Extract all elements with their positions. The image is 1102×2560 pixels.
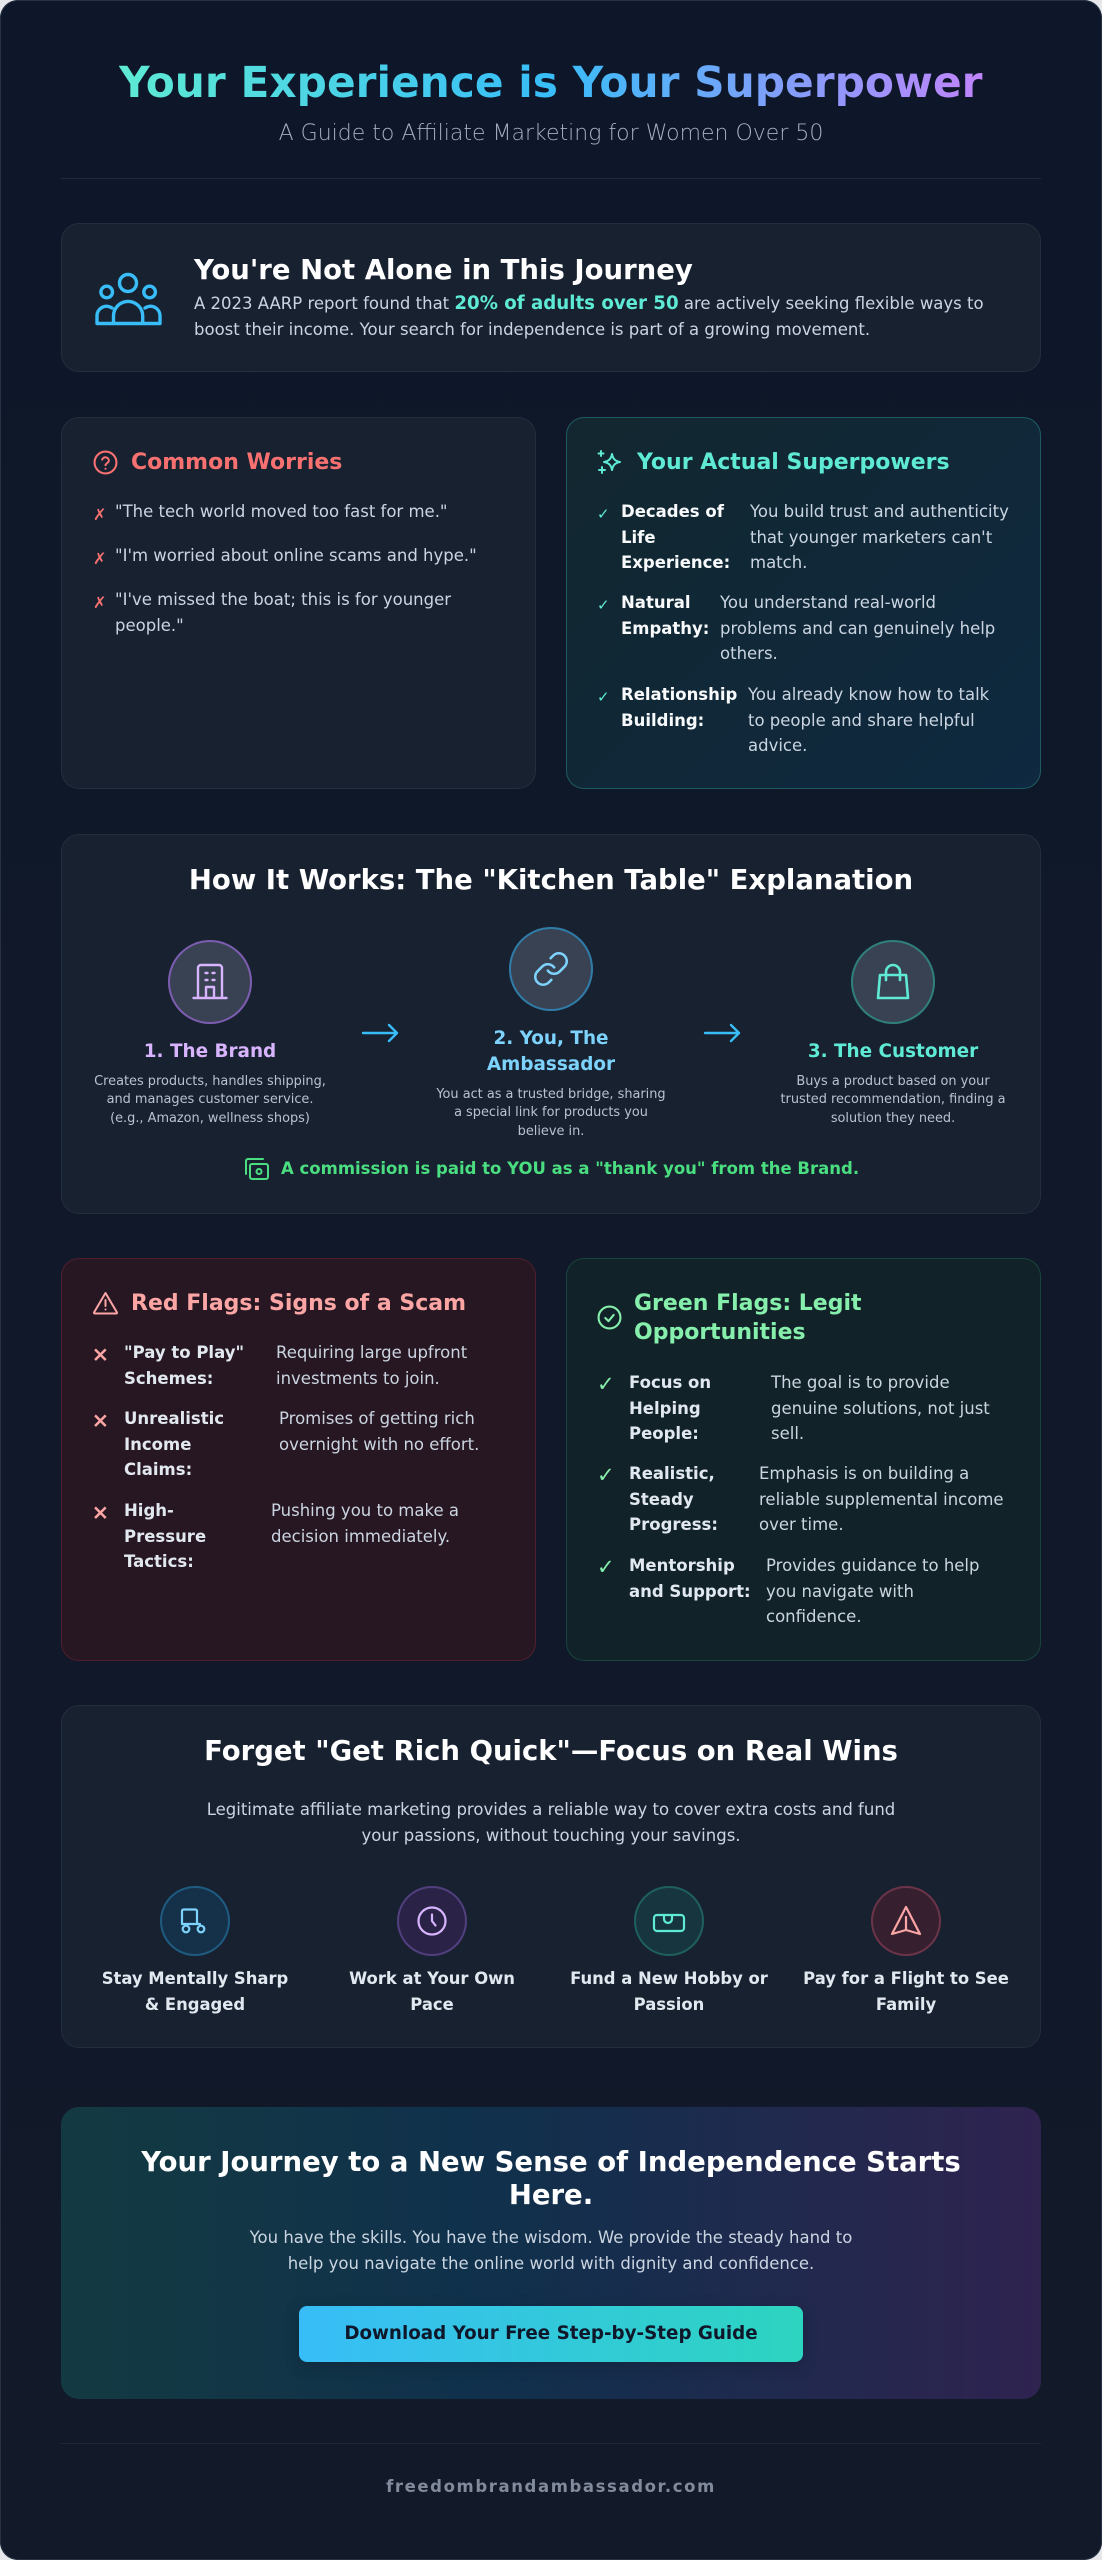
green flag item 3: Provides guidance to help bbox=[766, 1556, 980, 1575]
label: 1. The Brand bbox=[144, 1041, 276, 1062]
text block: your passions, without touching your savings. bbox=[361, 1826, 741, 1845]
green flag item 1: Helping bbox=[629, 1399, 701, 1418]
text block bbox=[194, 293, 984, 339]
superpower item 1: ✓ bbox=[597, 505, 610, 523]
icon: sparkles bbox=[598, 450, 621, 474]
label: & Engaged bbox=[145, 1995, 245, 2014]
green flag item 1: genuine solutions, not just bbox=[771, 1399, 990, 1418]
red flag item 2: Income bbox=[124, 1435, 191, 1454]
heading: common worries: Common Worries bbox=[131, 450, 342, 475]
panel: not alone bbox=[61, 223, 1041, 372]
description bbox=[94, 1074, 326, 1126]
superpower item 1: Experience: bbox=[621, 553, 730, 572]
green flag item 1: sell. bbox=[771, 1424, 804, 1443]
label bbox=[786, 1966, 1026, 2017]
step 3: customer bbox=[780, 940, 1006, 1126]
heading bbox=[61, 2146, 1041, 2212]
heading: superpowers: Your Actual Superpowers bbox=[637, 450, 950, 475]
icon: warning bbox=[93, 1292, 118, 1314]
label: Stay Mentally Sharp bbox=[102, 1969, 288, 1988]
label: Pay for a Flight to See bbox=[803, 1969, 1009, 1988]
green flag item 2: reliable supplemental income bbox=[759, 1490, 1004, 1509]
red flag item 1: ✕ bbox=[92, 1343, 109, 1367]
green flag item 1: The goal is to provide bbox=[771, 1373, 950, 1392]
panel: common worries bbox=[61, 417, 536, 789]
description: a special link for products you bbox=[454, 1105, 648, 1120]
green flag item 3: you navigate with bbox=[766, 1582, 914, 1601]
icon: paper plane bbox=[871, 1886, 941, 1956]
description bbox=[436, 1087, 666, 1139]
red flag item 1 bbox=[92, 1343, 467, 1388]
icon: link bbox=[509, 927, 593, 1011]
superpower item 3: Building: bbox=[621, 711, 704, 730]
text block bbox=[61, 2225, 1041, 2276]
commission callout: A commission is paid to YOU as a "thank you" from the Brand. bbox=[281, 1159, 859, 1178]
panel: red flags bbox=[61, 1258, 536, 1661]
worry item 2: "I'm worried about online scams and hype." bbox=[115, 546, 477, 565]
text block: A 2023 AARP report found that 20% of adults over 50 are actively seeking flexible ways to bbox=[194, 293, 984, 314]
red flag item 3: ✕ bbox=[92, 1501, 109, 1525]
win 4: flight bbox=[786, 1886, 1026, 2016]
label: Pace bbox=[410, 1995, 454, 2014]
description: You act as a trusted bridge, sharing bbox=[436, 1087, 666, 1102]
worry item 3: "I've missed the boat; this is for younger bbox=[115, 590, 451, 609]
description: Creates products, handles shipping, bbox=[94, 1074, 326, 1089]
heading: How It Works: The "Kitchen Table" Explanation bbox=[189, 864, 913, 896]
icon: bag bbox=[851, 940, 935, 1024]
red flag item 3 bbox=[92, 1501, 459, 1571]
win 1: mentally sharp bbox=[102, 1886, 288, 2014]
button: Download Your Free Step-by-Step Guide bbox=[344, 2323, 758, 2344]
description: and manages customer service. bbox=[107, 1092, 313, 1107]
green flag item 2: ✓ bbox=[597, 1463, 615, 1487]
red flag item 2: Promises of getting rich bbox=[279, 1409, 475, 1428]
win 3: hobby bbox=[570, 1886, 768, 2014]
arrow bbox=[362, 1024, 398, 1042]
red flag item 2: overnight with no effort. bbox=[279, 1435, 479, 1454]
description: solution they need. bbox=[831, 1111, 955, 1126]
red flag item 1: Schemes: bbox=[124, 1369, 213, 1388]
heading: Forget "Get Rich Quick"—Focus on Real Wins bbox=[204, 1735, 898, 1767]
red flag item 3: Pushing you to make a bbox=[271, 1501, 459, 1520]
description: trusted recommendation, finding a bbox=[780, 1092, 1006, 1107]
green flag item 3: ✓ bbox=[597, 1555, 615, 1579]
text block: boost their income. Your search for independence is part of a growing movement. bbox=[194, 320, 870, 339]
superpower item 2: Natural bbox=[621, 593, 691, 612]
panel: real wins bbox=[61, 1705, 1041, 2048]
label: Fund a New Hobby or bbox=[570, 1969, 768, 1988]
label bbox=[549, 1966, 789, 2017]
text block: You have the skills. You have the wisdom. We provide the steady hand to bbox=[250, 2228, 852, 2247]
description: Buys a product based on your bbox=[796, 1074, 990, 1089]
superpower item 2: others. bbox=[720, 644, 778, 663]
worry item 3 bbox=[93, 590, 452, 635]
step 1: the brand bbox=[94, 940, 326, 1126]
green flag item 3: and Support: bbox=[629, 1582, 751, 1601]
icon: group of people bbox=[95, 272, 162, 326]
worry item 3: people." bbox=[115, 616, 184, 635]
label bbox=[349, 1969, 515, 2014]
superpower item 3 bbox=[597, 685, 989, 755]
superpower item 1: that younger marketers can't bbox=[750, 528, 992, 547]
text block: Legitimate affiliate marketing provides a reliable way to cover extra costs and fund bbox=[207, 1800, 895, 1819]
icon: question bbox=[94, 450, 118, 474]
panel: green flags bbox=[566, 1258, 1041, 1661]
red flag item 3: High- bbox=[124, 1501, 174, 1520]
superpower item 1: Decades of bbox=[621, 502, 724, 521]
green flag item 2: Progress: bbox=[629, 1515, 718, 1534]
superpower item 2: You understand real-world bbox=[720, 593, 936, 612]
heading: Here. bbox=[509, 2179, 593, 2211]
red flag item 1: Requiring large upfront bbox=[276, 1343, 467, 1362]
red flag item 2: Claims: bbox=[124, 1460, 192, 1479]
label: Work at Your Own bbox=[349, 1969, 515, 1988]
step 2: ambassador bbox=[436, 927, 666, 1139]
panel: superpowers bbox=[566, 417, 1041, 789]
label: Family bbox=[876, 1995, 936, 2014]
win 2: own pace bbox=[349, 1886, 515, 2014]
heading: green flags bbox=[598, 1291, 862, 1345]
red flag item 2: ✕ bbox=[92, 1409, 109, 1433]
green flag item 3: confidence. bbox=[766, 1607, 862, 1626]
subtitle: A Guide to Affiliate Marketing for Women Over 50 bbox=[279, 121, 823, 146]
label: 3. The Customer bbox=[808, 1041, 978, 1062]
icon: money bbox=[245, 1158, 269, 1180]
superpower item 2 bbox=[597, 593, 995, 663]
heading: You're Not Alone in This Journey bbox=[194, 254, 693, 286]
worry item 2: ✗ bbox=[93, 549, 106, 568]
green flag item 1: Focus on bbox=[629, 1373, 711, 1392]
heading: Your Journey to a New Sense of Independence Starts bbox=[141, 2146, 961, 2178]
red flag item 2 bbox=[92, 1409, 479, 1479]
worry item 1: ✗ bbox=[93, 505, 106, 524]
heading: red flags: Red Flags: Signs of a Scam bbox=[131, 1291, 466, 1316]
icon: check circle bbox=[598, 1306, 622, 1330]
green flag item 3: Mentorship bbox=[629, 1556, 735, 1575]
superpower item 1: match. bbox=[750, 553, 807, 572]
superpower item 2: ✓ bbox=[597, 596, 610, 614]
icon: wallet bbox=[634, 1886, 704, 1956]
label: 2. You, The bbox=[493, 1028, 609, 1049]
superpower item 3: Relationship bbox=[621, 685, 737, 704]
heading: green flags: Green Flags: Legit bbox=[634, 1291, 862, 1316]
green flag item 1 bbox=[597, 1372, 990, 1443]
superpower item 2: Empathy: bbox=[621, 619, 709, 638]
footer: freedombrandambassador.com bbox=[386, 2477, 716, 2496]
superpower item 3: You already know how to talk bbox=[748, 685, 989, 704]
green flag item 1: People: bbox=[629, 1424, 699, 1443]
icon: clock bbox=[397, 1886, 467, 1956]
red flag item 1: investments to join. bbox=[276, 1369, 440, 1388]
green flag item 2: Steady bbox=[629, 1490, 694, 1509]
red flag item 3: Tactics: bbox=[124, 1552, 194, 1571]
icon: building bbox=[168, 940, 252, 1024]
icon: wheels bbox=[160, 1886, 230, 1956]
label bbox=[487, 1028, 615, 1075]
green flag item 3 bbox=[597, 1555, 980, 1626]
title: Your Experience is Your Superpower bbox=[119, 58, 983, 107]
green flag item 1: ✓ bbox=[597, 1372, 615, 1396]
description: (e.g., Amazon, wellness shops) bbox=[110, 1111, 310, 1126]
label: Ambassador bbox=[487, 1054, 615, 1075]
green flag item 2: Emphasis is on building a bbox=[759, 1464, 969, 1483]
text block bbox=[207, 1800, 895, 1845]
label: Passion bbox=[634, 1995, 704, 2014]
label bbox=[102, 1969, 288, 2014]
red flag item 3: decision immediately. bbox=[271, 1527, 450, 1546]
list: worries bbox=[93, 502, 477, 635]
superpower item 1 bbox=[597, 502, 1009, 572]
text block: help you navigate the online world with dignity and confidence. bbox=[288, 2254, 814, 2273]
heading: green flags: Opportunities bbox=[634, 1320, 806, 1345]
superpower item 3: to people and share helpful bbox=[748, 711, 975, 730]
red flag item 3: Pressure bbox=[124, 1527, 206, 1546]
arrow bbox=[704, 1024, 740, 1042]
superpower item 3: advice. bbox=[748, 736, 807, 755]
superpower item 2: problems and can genuinely help bbox=[720, 619, 995, 638]
green flag item 2: over time. bbox=[759, 1515, 844, 1534]
worry item 3: ✗ bbox=[93, 593, 106, 612]
superpower item 3: ✓ bbox=[597, 688, 610, 706]
green flag item 2 bbox=[597, 1463, 1004, 1534]
button bbox=[299, 2306, 803, 2362]
red flag item 1: "Pay to Play" bbox=[124, 1343, 244, 1362]
superpower item 1: Life bbox=[621, 528, 656, 547]
description: believe in. bbox=[518, 1124, 584, 1139]
red flag item 2: Unrealistic bbox=[124, 1409, 224, 1428]
superpower item 1: You build trust and authenticity bbox=[750, 502, 1009, 521]
panel: call to action bbox=[61, 2107, 1041, 2399]
worry item 1: "The tech world moved too fast for me." bbox=[115, 502, 448, 521]
description bbox=[780, 1074, 1006, 1126]
green flag item 2: Realistic, bbox=[629, 1464, 715, 1483]
panel: how it works bbox=[61, 834, 1041, 1214]
